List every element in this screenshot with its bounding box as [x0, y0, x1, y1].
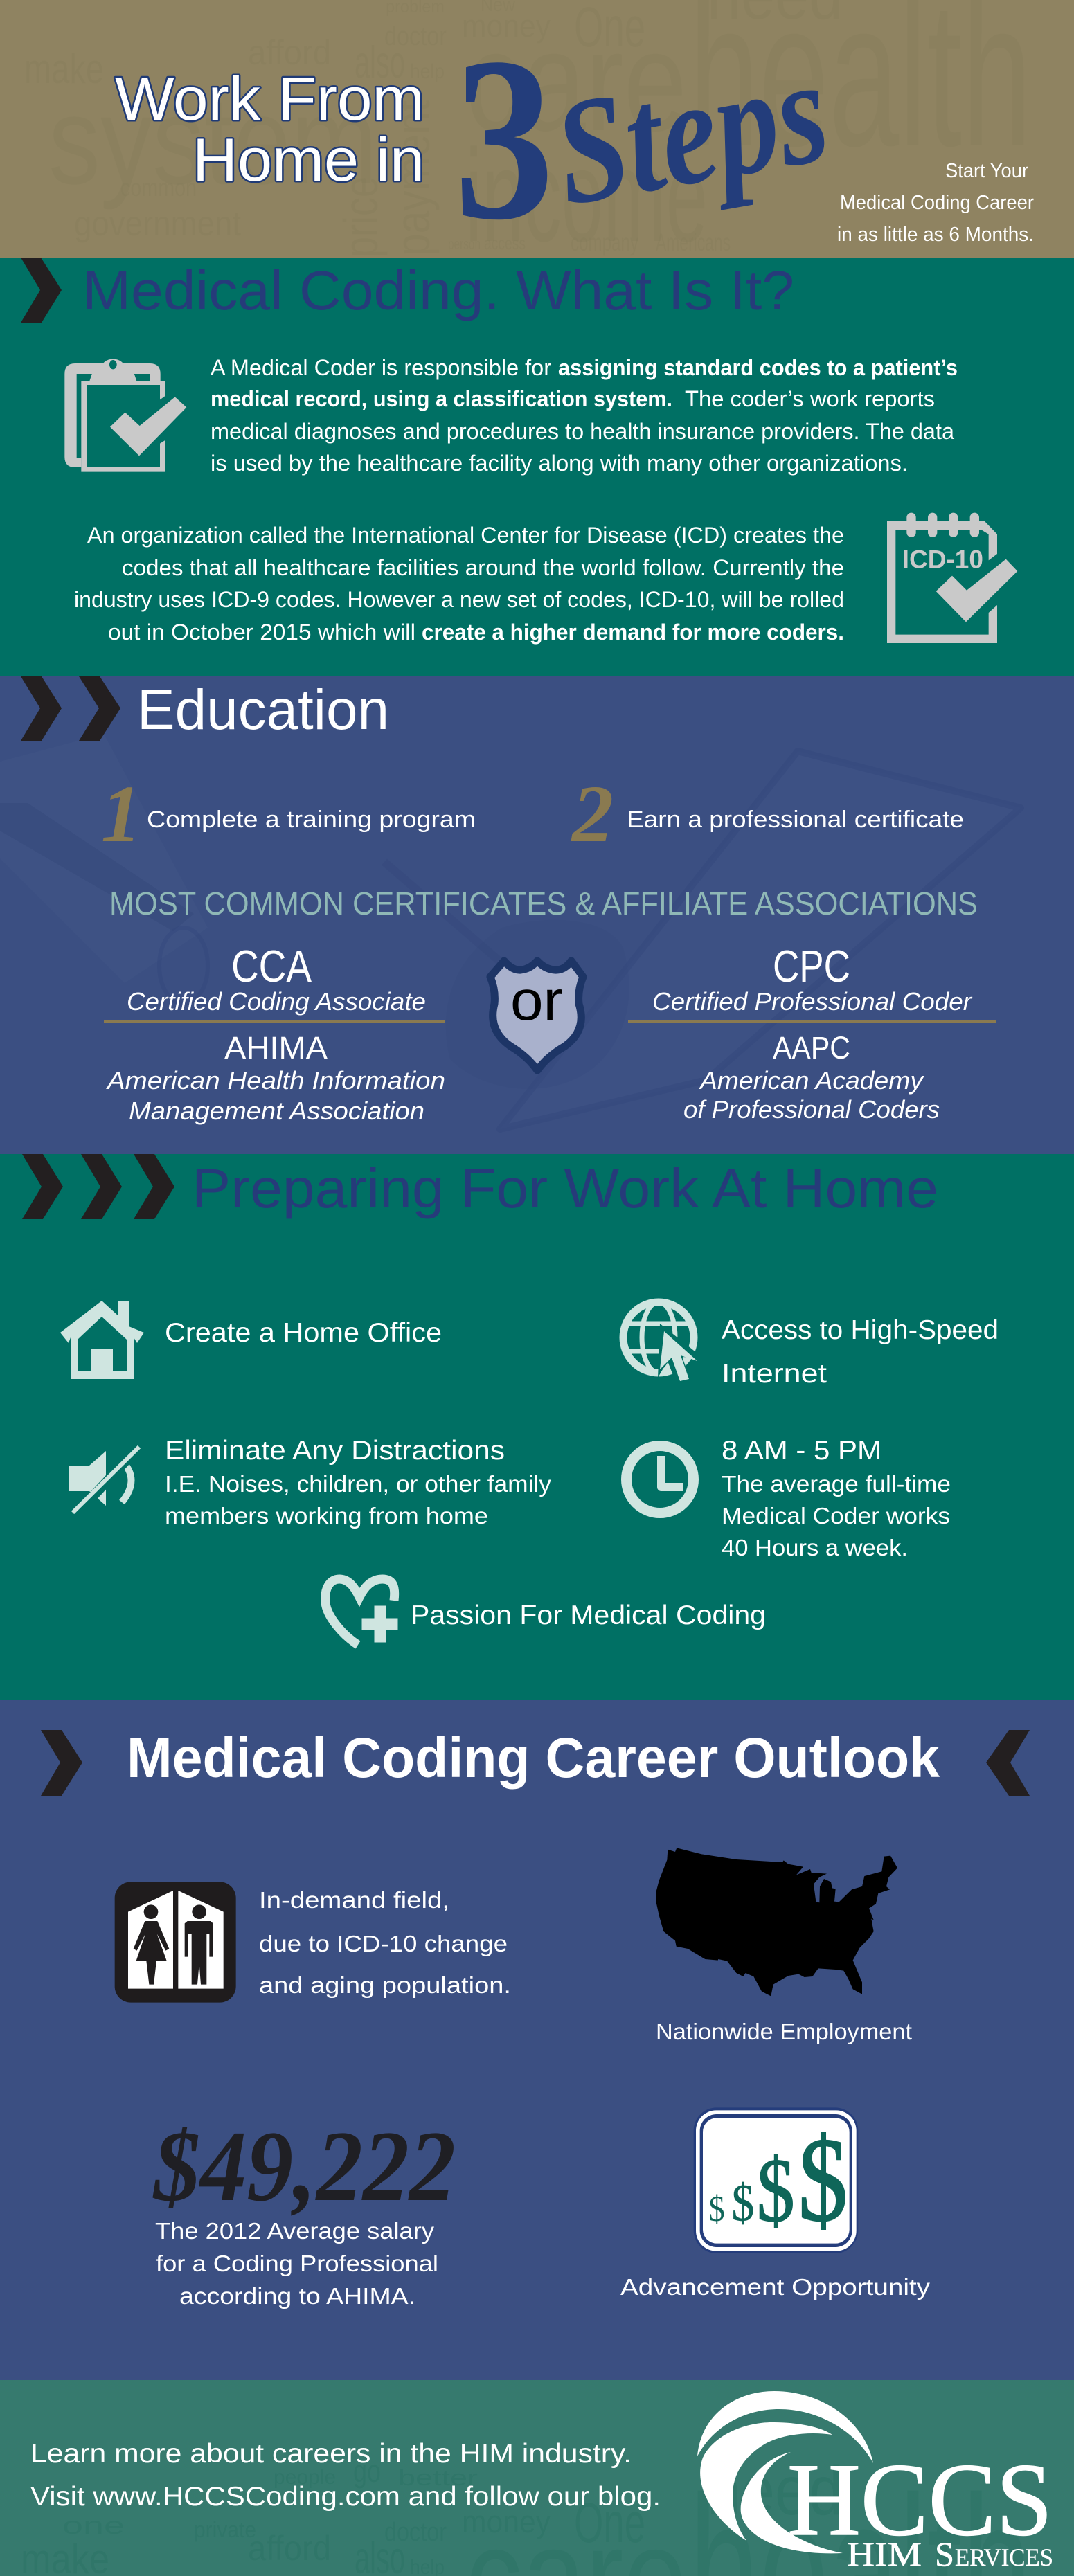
certificate column: CPC and AAPC: of Professional Coders — [683, 1095, 940, 1124]
icon: dollar signs box: $ — [732, 2174, 754, 2233]
icon: ICD-10 notebook with check — [887, 513, 1017, 643]
tagline — [837, 160, 1034, 246]
icon: clipboard with check — [64, 359, 186, 472]
word cloud background: system — [48, 71, 377, 210]
word cloud background: one — [62, 2512, 125, 2539]
text block: ICD explanation: create a higher demand for more coders. — [422, 620, 844, 645]
word cloud background: money — [462, 8, 551, 44]
certificate column: CPC and AAPC: AAPC — [773, 1030, 850, 1065]
tagline: in as little as 6 Months. — [837, 224, 1034, 246]
word cloud background: government — [74, 204, 241, 243]
text block: definition: medical diagnoses and procedures to health insurance providers. The data — [211, 419, 954, 444]
text: 8 AM - 5 PM hours — [722, 1436, 951, 1560]
stat: average salary — [152, 2110, 456, 2309]
title: Work From Home in — [115, 64, 424, 194]
text: Eliminate Any Distractions: Eliminate Any Distractions — [165, 1436, 505, 1466]
certificate column: CCA and AHIMA: Management Association — [129, 1097, 424, 1125]
word cloud background: private — [194, 2517, 256, 2542]
background photo: clipboard and hand — [0, 734, 1021, 1129]
logo: HCCS HIM Services: HCCS — [787, 2442, 1053, 2557]
panel: career outlook — [0, 1700, 1074, 2380]
text: Create a Home Office: Create a Home Office — [165, 1318, 442, 1348]
heading: Education: Education — [137, 678, 389, 741]
text: Access to High-Speed Internet — [722, 1315, 999, 1389]
step 2 — [571, 768, 964, 859]
certificate column: CPC and AAPC: American Academy — [699, 1066, 924, 1095]
word cloud background: access — [484, 233, 526, 253]
text block: definition: medical record, using a classification system. — [211, 386, 672, 411]
text: Passion For Medical Coding: Passion For Medical Coding — [411, 1601, 766, 1630]
text: Access to High-Speed Internet: Access to High-Speed — [722, 1315, 999, 1345]
icon: heart with plus — [325, 1579, 399, 1645]
panel: footer — [0, 2380, 1074, 2576]
icon: chevron — [21, 258, 62, 323]
panel: what is medical coding — [0, 258, 1074, 676]
text block: definition: A Medical Coder is responsible for — [211, 355, 551, 380]
icon: muted speaker — [69, 1441, 144, 1517]
text: Eliminate Any Distractions: members working from home — [165, 1503, 488, 1529]
word cloud background: doctor — [384, 22, 447, 51]
badge: or — [490, 961, 583, 1070]
text: 8 AM - 5 PM hours: 40 Hours a week. — [722, 1535, 908, 1560]
word cloud background: better — [398, 2465, 478, 2490]
tagline: Start Your — [945, 160, 1028, 182]
icon: dollar signs box: $ — [798, 2114, 848, 2246]
icon: map of the United States — [656, 1848, 897, 1996]
text: in-demand field: and aging population. — [259, 1972, 511, 1998]
text: Advancement Opportunity: Advancement Opportunity — [620, 2274, 931, 2300]
text: 8 AM - 5 PM hours: Medical Coder works — [722, 1503, 950, 1529]
icon: clock — [626, 1445, 694, 1513]
word cloud background: afford — [248, 33, 331, 72]
word cloud background: make — [24, 46, 104, 92]
text block: definition — [211, 355, 958, 476]
text block: ICD explanation: industry uses ICD-9 codes. However a new set of codes, ICD-10, will be rolled — [74, 587, 844, 612]
heading: Medical Coding Career Outlook: Medical Coding Career Outlook — [127, 1727, 940, 1790]
word cloud background: common — [120, 174, 197, 201]
title: Work From Home in: Work From — [115, 64, 424, 133]
word cloud background: also — [355, 37, 405, 87]
text block: definition: assigning standard codes to a patient’s — [558, 355, 958, 380]
stat: average salary: $49,222 — [152, 2110, 456, 2222]
certificate column: CCA and AHIMA — [104, 941, 445, 1125]
panel: preparing for work at home — [0, 1154, 1074, 1700]
word cloud background: Americans — [656, 229, 731, 256]
certificate column: CPC and AAPC: Certified Professional Coder — [652, 987, 973, 1016]
logo: HCCS HIM Services: ERVICES — [955, 2543, 1053, 2571]
certificate column: CCA and AHIMA: AHIMA — [224, 1030, 328, 1065]
title: Work From Home in: Home in — [193, 125, 424, 194]
icon: house — [60, 1301, 144, 1379]
text: call to action: Learn more about careers in the HIM industry. — [30, 2439, 632, 2469]
text: Access to High-Speed Internet: Internet — [722, 1359, 827, 1389]
word cloud background: payment — [386, 100, 440, 256]
text block: definition: The coder’s work reports — [685, 386, 935, 411]
text: in-demand field — [259, 1887, 511, 1998]
text block: ICD explanation — [74, 523, 844, 645]
logo: HCCS HIM Services: S — [935, 2534, 954, 2573]
word cloud background: income — [465, 123, 708, 269]
word cloud background: One — [574, 2492, 645, 2555]
word cloud background: company — [571, 229, 638, 256]
word cloud background: afford — [248, 2529, 331, 2568]
certificate column: CCA and AHIMA: Certified Coding Associate — [127, 987, 426, 1016]
step 1: Complete a training program — [147, 807, 476, 833]
text block: definition: is used by the healthcare facility along with many other organizations. — [211, 451, 908, 476]
step 1 — [101, 768, 476, 859]
icon: triple chevron — [22, 1154, 174, 1219]
step 2: 2 — [571, 768, 614, 859]
text: 8 AM - 5 PM hours: 8 AM - 5 PM — [722, 1436, 881, 1466]
title: Steps: Steps — [543, 26, 839, 237]
heading: Medical Coding. What Is It?: Medical Coding. What Is It? — [82, 260, 794, 321]
stat: average salary: The 2012 Average salary — [155, 2218, 435, 2244]
text block: ICD explanation: An organization called the International Center for Disease (ICD) creates the — [87, 523, 844, 548]
icon: man and woman sign — [115, 1882, 236, 2003]
panel: education — [21, 676, 996, 1124]
certificate column: CCA and AHIMA: CCA — [231, 941, 312, 991]
stat: average salary: according to AHIMA. — [179, 2283, 415, 2309]
word cloud background — [697, 2391, 1014, 2553]
word cloud background: need — [707, 2452, 843, 2530]
icon: dollar signs box — [694, 2107, 858, 2253]
word cloud background: doctor — [384, 2518, 447, 2547]
icon: dollar signs box: $ — [757, 2141, 795, 2241]
icon: double chevron — [21, 676, 120, 741]
stat: average salary: for a Coding Professional — [156, 2251, 438, 2276]
certificate column: CPC and AAPC — [628, 941, 996, 1124]
step 2: Earn a professional certificate — [627, 807, 964, 833]
heading: certificates: MOST COMMON CERTIFICATES & AFFILIATE ASSOCIATIONS — [109, 885, 978, 921]
icon: dollar signs box: $ — [708, 2189, 725, 2229]
word cloud background: person — [448, 235, 481, 253]
text: call to action: Visit www.HCCSCoding.com and follow our blog. — [30, 2482, 661, 2512]
icon: left chevron — [41, 1730, 82, 1796]
word cloud background — [24, 0, 1032, 269]
step 1: 1 — [101, 768, 141, 859]
heading: Preparing For Work At Home: Preparing For Work At Home — [192, 1158, 938, 1219]
title: big 3: 3 — [454, 10, 554, 269]
word cloud background: price — [334, 177, 388, 258]
certificate column: CPC and AAPC: CPC — [773, 941, 850, 991]
badge: or: or — [510, 969, 563, 1032]
panel: header banner — [0, 0, 1074, 269]
text: in-demand field: In-demand field, — [259, 1887, 449, 1913]
text block: ICD explanation: out in October 2015 which will — [108, 620, 415, 645]
logo: HCCS HIM Services — [697, 2391, 1053, 2573]
logo: HCCS HIM Services: HIM — [847, 2534, 922, 2573]
text: 8 AM - 5 PM hours: The average full-time — [722, 1471, 951, 1497]
icon: ICD-10 notebook with check: ICD-10 — [902, 545, 983, 574]
word cloud background: care — [465, 2, 687, 161]
certificate column: CCA and AHIMA: American Health Information — [106, 1066, 445, 1095]
word cloud background: money — [462, 2504, 551, 2539]
word cloud background: go — [353, 2453, 381, 2489]
word cloud background: help — [410, 60, 445, 83]
word cloud background: people — [274, 2466, 336, 2489]
text: Eliminate Any Distractions — [165, 1436, 552, 1529]
text: Nationwide Employment: Nationwide Employment — [656, 2019, 912, 2044]
text: in-demand field: due to ICD-10 change — [259, 1931, 508, 1956]
text block: ICD explanation: codes that all healthcare facilities around the world follow. Currently the — [122, 555, 844, 580]
icon: globe with cursor — [623, 1302, 704, 1386]
text: call to action — [30, 2439, 661, 2512]
icon: right chevron — [986, 1730, 1030, 1796]
text: Eliminate Any Distractions: I.E. Noises, children, or other family — [165, 1471, 552, 1497]
tagline: Medical Coding Career — [840, 192, 1034, 214]
